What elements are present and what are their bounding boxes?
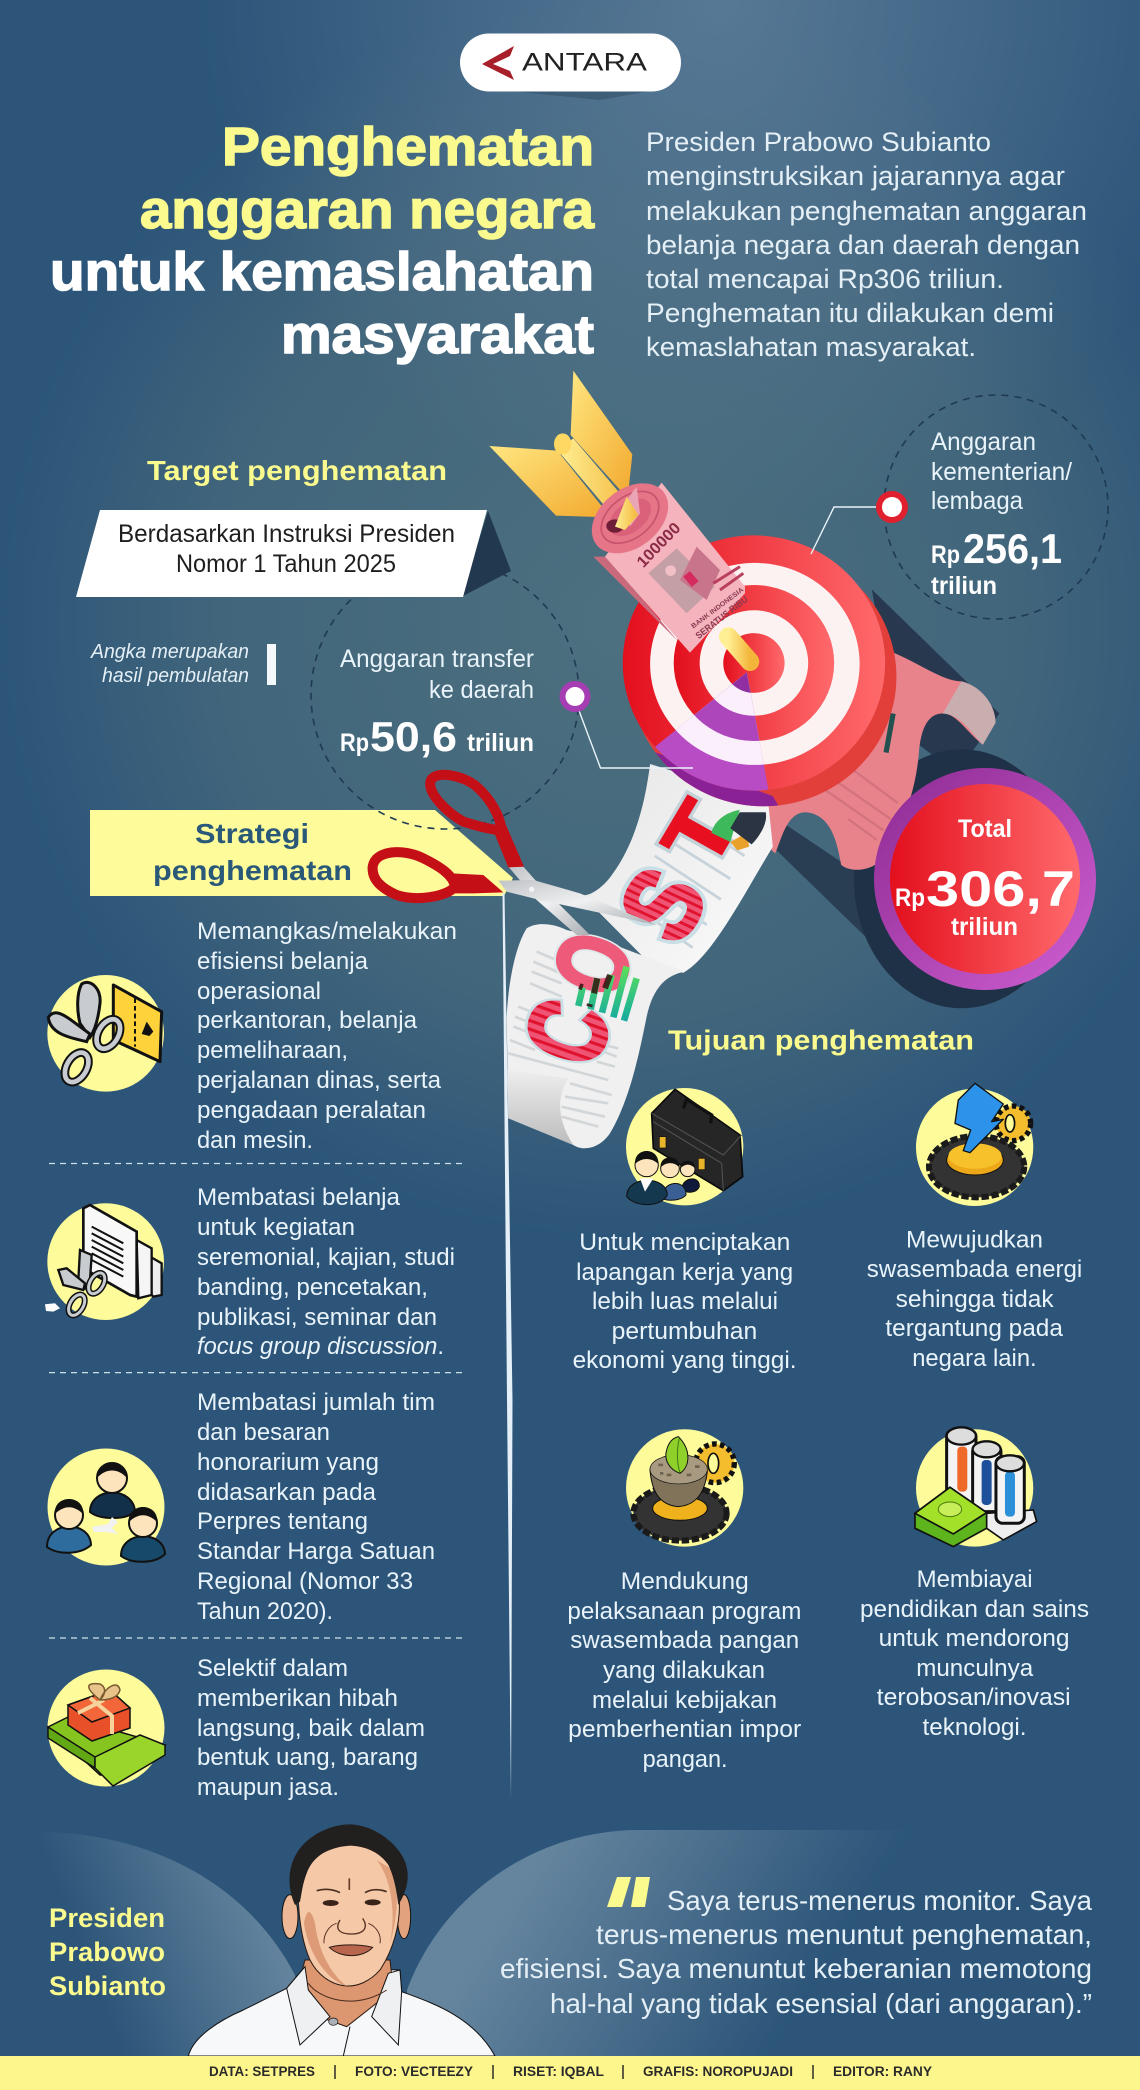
logo pill: ANTARA	[460, 34, 681, 100]
tujuan 1: pertumbuhan	[612, 1318, 757, 1345]
strategi heading box: penghematan	[153, 855, 352, 886]
strategi item 4: maupun jasa.	[197, 1774, 339, 1801]
strategi item 4: memberikan hibah	[197, 1685, 398, 1712]
strategi item 3: honorarium yang	[197, 1449, 379, 1476]
strategi item 1: operasional	[197, 978, 321, 1005]
tujuan 4: terobosan/inovasi	[877, 1684, 1071, 1711]
intro paragraph	[646, 127, 1087, 362]
strategi item 4	[197, 1655, 425, 1801]
tujuan 4: munculnya	[916, 1655, 1034, 1682]
divider 3	[49, 1637, 462, 1639]
rounding note	[90, 641, 276, 687]
strategi heading box	[90, 810, 513, 896]
strategi item 3: Tahun 2020).	[197, 1598, 333, 1625]
callout line: transfer ke daerah	[575, 700, 693, 768]
strategi item 2: seremonial, kajian, studi	[197, 1244, 455, 1271]
strategi item 1: pengadaan peralatan	[197, 1097, 426, 1124]
icon: test tubes and money	[915, 1427, 1037, 1547]
intro paragraph: total mencapai Rp306 triliun.	[646, 264, 1004, 294]
icon: scissors cutting documents	[45, 1203, 164, 1320]
tujuan 2: tergantung pada	[885, 1315, 1063, 1342]
right dashed circle: kementerian: Anggaran	[931, 428, 1036, 456]
transfer ke daerah text: 50,6	[370, 713, 457, 760]
strategi item 3: didasarkan pada	[197, 1479, 376, 1506]
strategi item 3: Membatasi jumlah tim	[197, 1389, 435, 1416]
node: kementerian	[876, 491, 908, 523]
quote text	[500, 1885, 1092, 2019]
tujuan 3: pelaksanaan program	[567, 1598, 801, 1625]
transfer ke daerah text	[340, 645, 534, 760]
strategi item 3	[197, 1389, 435, 1625]
tujuan 4: Membiayai	[917, 1566, 1033, 1593]
strategi item 2: Membatasi belanja	[197, 1184, 400, 1211]
tujuan 3: Mendukung	[621, 1568, 749, 1595]
lower white ribbon with letters C and O: C	[501, 986, 635, 1078]
arrow tip	[728, 637, 750, 662]
strategi item 4: bentuk uang, barang	[197, 1744, 418, 1771]
total circle: triliun	[951, 913, 1018, 941]
footer credits	[0, 2056, 1140, 2090]
instruction box: Berdasarkan Instruksi Presiden	[118, 520, 455, 548]
tujuan 2	[867, 1083, 1082, 1372]
title: anggaran negara	[140, 180, 595, 240]
strategi item 4: Selektif dalam	[197, 1655, 348, 1682]
intro paragraph: Penghematan itu dilakukan demi	[646, 298, 1054, 328]
icon: briefcase and people	[626, 1088, 743, 1205]
tujuan 3: melalui kebijakan	[592, 1687, 777, 1714]
tujuan 3	[567, 1429, 801, 1773]
strategi item 2: banding, pencetakan,	[197, 1274, 428, 1301]
strategi item 1: Memangkas/melakukan	[197, 918, 457, 945]
icon: plant on gear	[626, 1429, 743, 1547]
rounding note: hasil pembulatan	[102, 665, 249, 687]
tujuan 3: pangan.	[643, 1746, 728, 1773]
left hill background	[40, 1832, 300, 2056]
right dashed circle: kementerian: lembaga	[931, 487, 1023, 515]
strategi item 2: focus group discussion.	[197, 1333, 444, 1360]
instruction box: Nomor 1 Tahun 2025	[176, 550, 396, 578]
tujuan 4	[860, 1427, 1089, 1741]
strategi item 3: dan besaran	[197, 1419, 330, 1446]
footer credits: RISET: IQBAL	[513, 2064, 604, 2079]
long shadow	[773, 590, 1069, 1008]
money roll: BANK INDONESIA	[690, 586, 745, 630]
heading: target penghematan: Target penghematan	[147, 455, 447, 486]
transfer ke daerah text: Anggaran transfer	[340, 645, 534, 673]
quote text: efisiensi. Saya menuntut keberanian memotong	[500, 1953, 1092, 1984]
intro paragraph: kemaslahatan masyarakat.	[646, 332, 976, 362]
strategi item 2: publikasi, seminar dan	[197, 1304, 437, 1331]
lower white ribbon with letters C and O: O	[532, 920, 655, 1008]
upper white ribbon with letters S and T: S	[596, 850, 730, 960]
tujuan 2: negara lain.	[912, 1345, 1037, 1372]
icon: scissors cutting ticket	[47, 975, 164, 1092]
strategi item 1: perkantoran, belanja	[197, 1007, 417, 1034]
tujuan 4: pendidikan dan sains	[860, 1596, 1089, 1623]
icon: team of three people	[47, 1448, 165, 1566]
upper white ribbon with letters S and T	[582, 764, 773, 973]
total circle: 306,7	[926, 861, 1075, 917]
strategi item 3: Regional (Nomor 33	[197, 1568, 413, 1595]
money roll	[578, 469, 750, 653]
icon: gift on money	[48, 1670, 165, 1786]
scissors	[373, 775, 657, 935]
tujuan 3: pemberhentian impor	[568, 1716, 801, 1743]
strategi item 3: Standar Harga Satuan	[197, 1538, 435, 1565]
tujuan 2: sehingga tidak	[896, 1286, 1054, 1313]
quote text: Saya terus-menerus monitor. Saya	[667, 1885, 1092, 1916]
title: untuk kemaslahatan	[50, 242, 594, 302]
divider 2	[49, 1372, 462, 1374]
heading: tujuan penghematan: Tujuan penghematan	[668, 1024, 974, 1056]
rounding note: Angka merupakan	[90, 641, 249, 663]
divider 1	[49, 1162, 462, 1164]
money roll: 100000	[634, 520, 684, 571]
president name: Presiden	[49, 1903, 165, 1933]
president name: Prabowo	[49, 1937, 165, 1967]
quote text: hal-hal yang tidak esensial (dari anggaran).”	[550, 1988, 1092, 2019]
transfer ke daerah text: triliun	[467, 729, 534, 757]
right dashed circle: kementerian	[884, 395, 1108, 619]
central illustration: shadow, pink ribbon, upper white ribbon, target	[582, 535, 1069, 1008]
footer credits: DATA: SETPRES	[209, 2064, 315, 2079]
lower white ribbon with letters C and O	[501, 920, 685, 1148]
strategi item 2	[197, 1184, 455, 1360]
upper white ribbon with letters S and T: T	[644, 786, 755, 881]
instruction box	[76, 510, 511, 597]
title: masyarakat	[281, 305, 594, 365]
tujuan 1: lebih luas melalui	[592, 1288, 778, 1315]
title: Penghematan	[222, 117, 594, 177]
strategi item 2: untuk kegiatan	[197, 1214, 355, 1241]
strategi item 1: dan mesin.	[197, 1127, 313, 1154]
footer credits: EDITOR: RANY	[833, 2064, 932, 2079]
arrow and money roll	[489, 371, 750, 662]
lower white ribbon with letters C and O: C	[501, 986, 635, 1078]
tujuan 4: teknologi.	[922, 1714, 1026, 1741]
strategi item 1: perjalanan dinas, serta	[197, 1067, 441, 1094]
strategi heading box: Strategi	[195, 818, 309, 849]
callout line: kementerian	[811, 507, 880, 554]
tujuan 4: untuk mendorong	[879, 1625, 1070, 1652]
right hill background	[407, 1830, 950, 2056]
strategi item 1: efisiensi belanja	[197, 948, 368, 975]
total circle: Rp	[895, 884, 925, 912]
portrait	[188, 1824, 495, 2056]
right dashed circle: kementerian: 256,1	[963, 525, 1062, 572]
total circle: Total	[958, 815, 1012, 843]
quote mark	[607, 1877, 650, 1907]
logo pill: ANTARA: ANTARA	[522, 48, 647, 76]
president name	[49, 1903, 166, 2001]
tujuan 1: ekonomi yang tinggi.	[573, 1347, 797, 1374]
right dashed circle: kementerian: Rp	[931, 541, 960, 569]
transfer ke daerah text: Rp	[340, 729, 369, 757]
total circle	[874, 768, 1096, 990]
intro paragraph: melakukan penghematan anggaran	[646, 196, 1087, 226]
vertical line	[502, 893, 512, 1800]
arrow feathers	[489, 371, 638, 530]
tujuan 2: Mewujudkan	[906, 1226, 1043, 1254]
tujuan 1: Untuk menciptakan	[579, 1229, 790, 1256]
right dashed circle: kementerian: triliun	[931, 572, 997, 600]
right dashed circle: kementerian: kementerian/	[931, 458, 1072, 486]
node: transfer ke daerah	[560, 681, 590, 712]
president name: Subianto	[49, 1971, 166, 2001]
intro paragraph: Presiden Prabowo Subianto	[646, 127, 991, 157]
strategi item 3: Perpres tentang	[197, 1508, 368, 1535]
money roll: SERATUS RIBU	[694, 594, 750, 641]
left dashed circle: anggaran transfer	[311, 561, 579, 829]
intro paragraph: menginstruksikan jajarannya agar	[646, 161, 1065, 191]
target side	[640, 586, 896, 806]
tujuan 1: lapangan kerja yang	[576, 1259, 793, 1286]
icon: lightning bolt on gear	[916, 1083, 1033, 1206]
transfer ke daerah text: ke daerah	[429, 676, 534, 704]
tujuan 2: swasembada energi	[867, 1256, 1082, 1283]
upper white ribbon with letters S and T: T	[644, 786, 755, 881]
tujuan 3: swasembada pangan	[570, 1627, 799, 1654]
footer credits: GRAFIS: NOROPUJADI	[643, 2064, 793, 2079]
strategi item 1: pemeliharaan,	[197, 1037, 348, 1064]
target face	[623, 535, 885, 791]
footer credits: FOTO: VECTEEZY	[355, 2064, 473, 2079]
pink ribbon	[740, 652, 996, 870]
quote text: terus-menerus menuntut penghematan,	[596, 1919, 1092, 1950]
strategi item 4: langsung, baik dalam	[197, 1715, 425, 1742]
upper white ribbon with letters S and T: S	[596, 850, 730, 960]
title	[50, 117, 595, 365]
tujuan 1	[573, 1088, 797, 1374]
strategi item 1	[197, 918, 457, 1154]
intro paragraph: belanja negara dan daerah dengan	[646, 230, 1080, 260]
tujuan 3: yang dilakukan	[603, 1657, 765, 1684]
lower white ribbon with letters C and O: O	[532, 920, 655, 1008]
